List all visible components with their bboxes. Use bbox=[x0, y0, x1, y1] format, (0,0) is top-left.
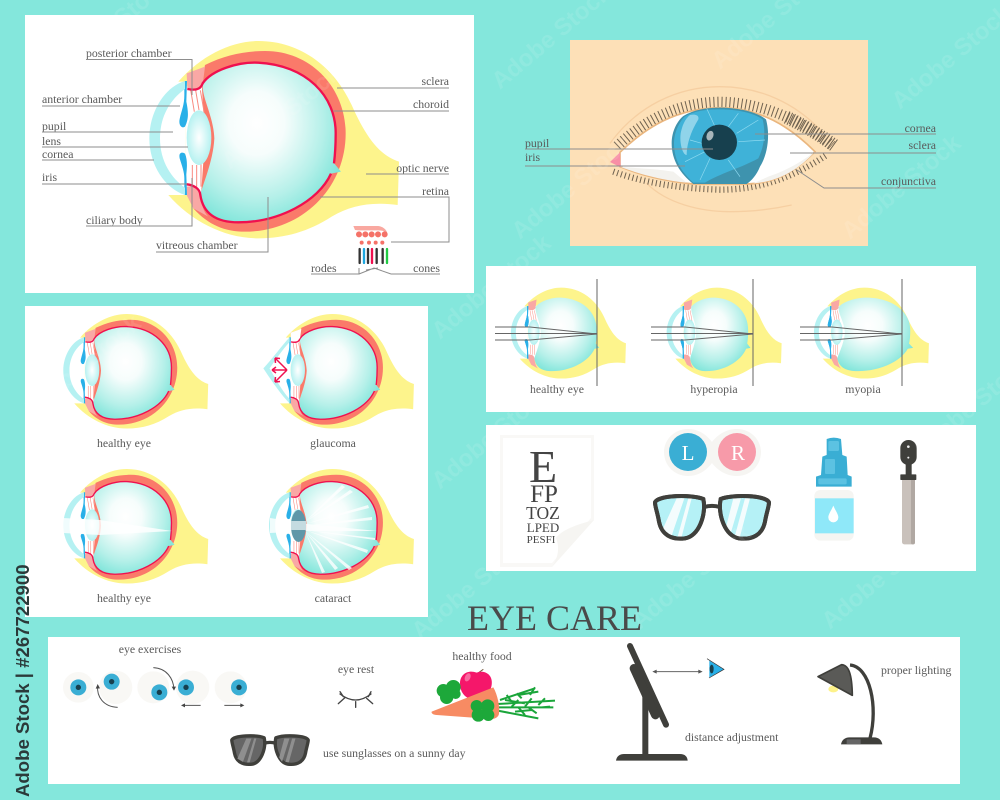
diagram: healthy eye with light beam: healthy eye bbox=[97, 591, 151, 605]
panel: eye conditions bbox=[25, 306, 428, 617]
eye chart: FP bbox=[530, 481, 558, 508]
eye illustration bbox=[610, 87, 835, 212]
diagram: healthy eye bbox=[63, 314, 208, 450]
distance adjustment bbox=[616, 646, 779, 761]
panel: refraction bbox=[486, 266, 976, 412]
labels and leader lines: iris bbox=[42, 170, 57, 184]
eye chart bbox=[500, 435, 594, 567]
labels and leader lines: anterior chamber bbox=[42, 92, 122, 106]
healthy food bbox=[432, 649, 555, 722]
diagram: glaucoma: glaucoma bbox=[310, 436, 357, 450]
eye drops bottle bbox=[814, 438, 854, 541]
labels and leader lines: iris bbox=[525, 150, 540, 164]
labels and leader lines: choroid bbox=[413, 97, 449, 111]
title: EYE CARE bbox=[467, 598, 642, 638]
contact lenses: L bbox=[682, 441, 694, 465]
labels and leader lines: sclera bbox=[421, 74, 450, 88]
panel: eye care tips bbox=[48, 637, 960, 784]
sunglasses: use sunglasses on a sunny day bbox=[323, 746, 466, 760]
labels and leader lines: retina bbox=[422, 184, 450, 198]
diagram: cataract bbox=[269, 469, 414, 605]
diagram: hyperopia focus bbox=[651, 279, 782, 396]
proper lighting lamp: proper lighting bbox=[881, 663, 952, 677]
contact lenses: R bbox=[731, 441, 745, 465]
watermark: Adobe Stock bbox=[507, 129, 637, 245]
watermark: Adobe Stock bbox=[837, 129, 967, 245]
eye rest bbox=[338, 662, 375, 707]
labels and leader lines: ciliary body bbox=[86, 213, 143, 227]
watermark: Adobe Stock bbox=[817, 519, 947, 635]
diagram: cataract: cataract bbox=[315, 591, 352, 605]
glasses bbox=[655, 496, 769, 539]
watermark bbox=[17, 0, 1000, 645]
panel: vision tools bbox=[486, 425, 976, 571]
eye chart: PESFI bbox=[527, 534, 556, 546]
distance adjustment: distance adjustment bbox=[685, 730, 779, 744]
eye exercises: eye exercises bbox=[119, 642, 182, 656]
panel: external eye anatomy bbox=[525, 40, 937, 246]
retina cell detail bbox=[353, 226, 388, 263]
diagram: healthy eye focus: healthy eye bbox=[530, 382, 584, 396]
labels and leader lines: sclera bbox=[908, 138, 937, 152]
labels and leader lines: cornea bbox=[905, 121, 937, 135]
healthy food: healthy food bbox=[452, 649, 512, 663]
diagram: myopia focus: myopia bbox=[845, 382, 881, 396]
panel: eye anatomy cross-section bbox=[25, 15, 474, 293]
watermark: Adobe Stock bbox=[427, 229, 557, 345]
watermark: Adobe Stock bbox=[407, 529, 537, 645]
labels and leader lines: posterior chamber bbox=[86, 46, 172, 60]
watermark: Adobe Stock bbox=[17, 309, 147, 425]
eye chart: LPED bbox=[527, 520, 559, 535]
diagram: myopia focus bbox=[800, 279, 929, 396]
diagram: glaucoma bbox=[263, 314, 414, 450]
labels and leader lines bbox=[42, 46, 450, 275]
proper lighting lamp bbox=[818, 663, 952, 744]
labels and leader lines: conjunctiva bbox=[881, 174, 937, 188]
eye chart: TOZ bbox=[526, 503, 560, 523]
watermark: Adobe Stock bbox=[627, 519, 757, 635]
ophthalmoscope bbox=[900, 440, 917, 544]
eye rest: eye rest bbox=[338, 662, 375, 676]
labels and leader lines: pupil bbox=[42, 119, 67, 133]
icon: pressure arrows bbox=[272, 358, 287, 382]
light rays scattering bbox=[270, 485, 377, 573]
eye exercises bbox=[63, 642, 247, 707]
diagram: healthy eye: healthy eye bbox=[97, 436, 151, 450]
diagram: healthy eye focus bbox=[495, 279, 626, 396]
labels and leader lines: optic nerve bbox=[396, 161, 449, 175]
diagram: hyperopia focus: hyperopia bbox=[690, 382, 738, 396]
labels and leader lines: rodes bbox=[311, 261, 337, 275]
labels and leader lines: vitreous chamber bbox=[156, 238, 238, 252]
labels and leader lines: cones bbox=[413, 261, 440, 275]
labels and leader lines: pupil bbox=[525, 136, 550, 150]
eye chart: E bbox=[529, 441, 557, 492]
watermark: Adobe Stock bbox=[427, 379, 557, 495]
watermark: Adobe Stock bbox=[217, 59, 347, 175]
diagram: healthy eye with light beam bbox=[63, 469, 208, 605]
sunglasses bbox=[232, 736, 466, 764]
contact lenses bbox=[664, 429, 761, 476]
stock photo vertical credit: Adobe Stock | #267722900 bbox=[12, 564, 33, 797]
labels and leader lines bbox=[525, 121, 937, 188]
large eye cross-section diagram bbox=[149, 41, 399, 238]
labels and leader lines: lens bbox=[42, 134, 61, 148]
labels and leader lines: cornea bbox=[42, 147, 74, 161]
